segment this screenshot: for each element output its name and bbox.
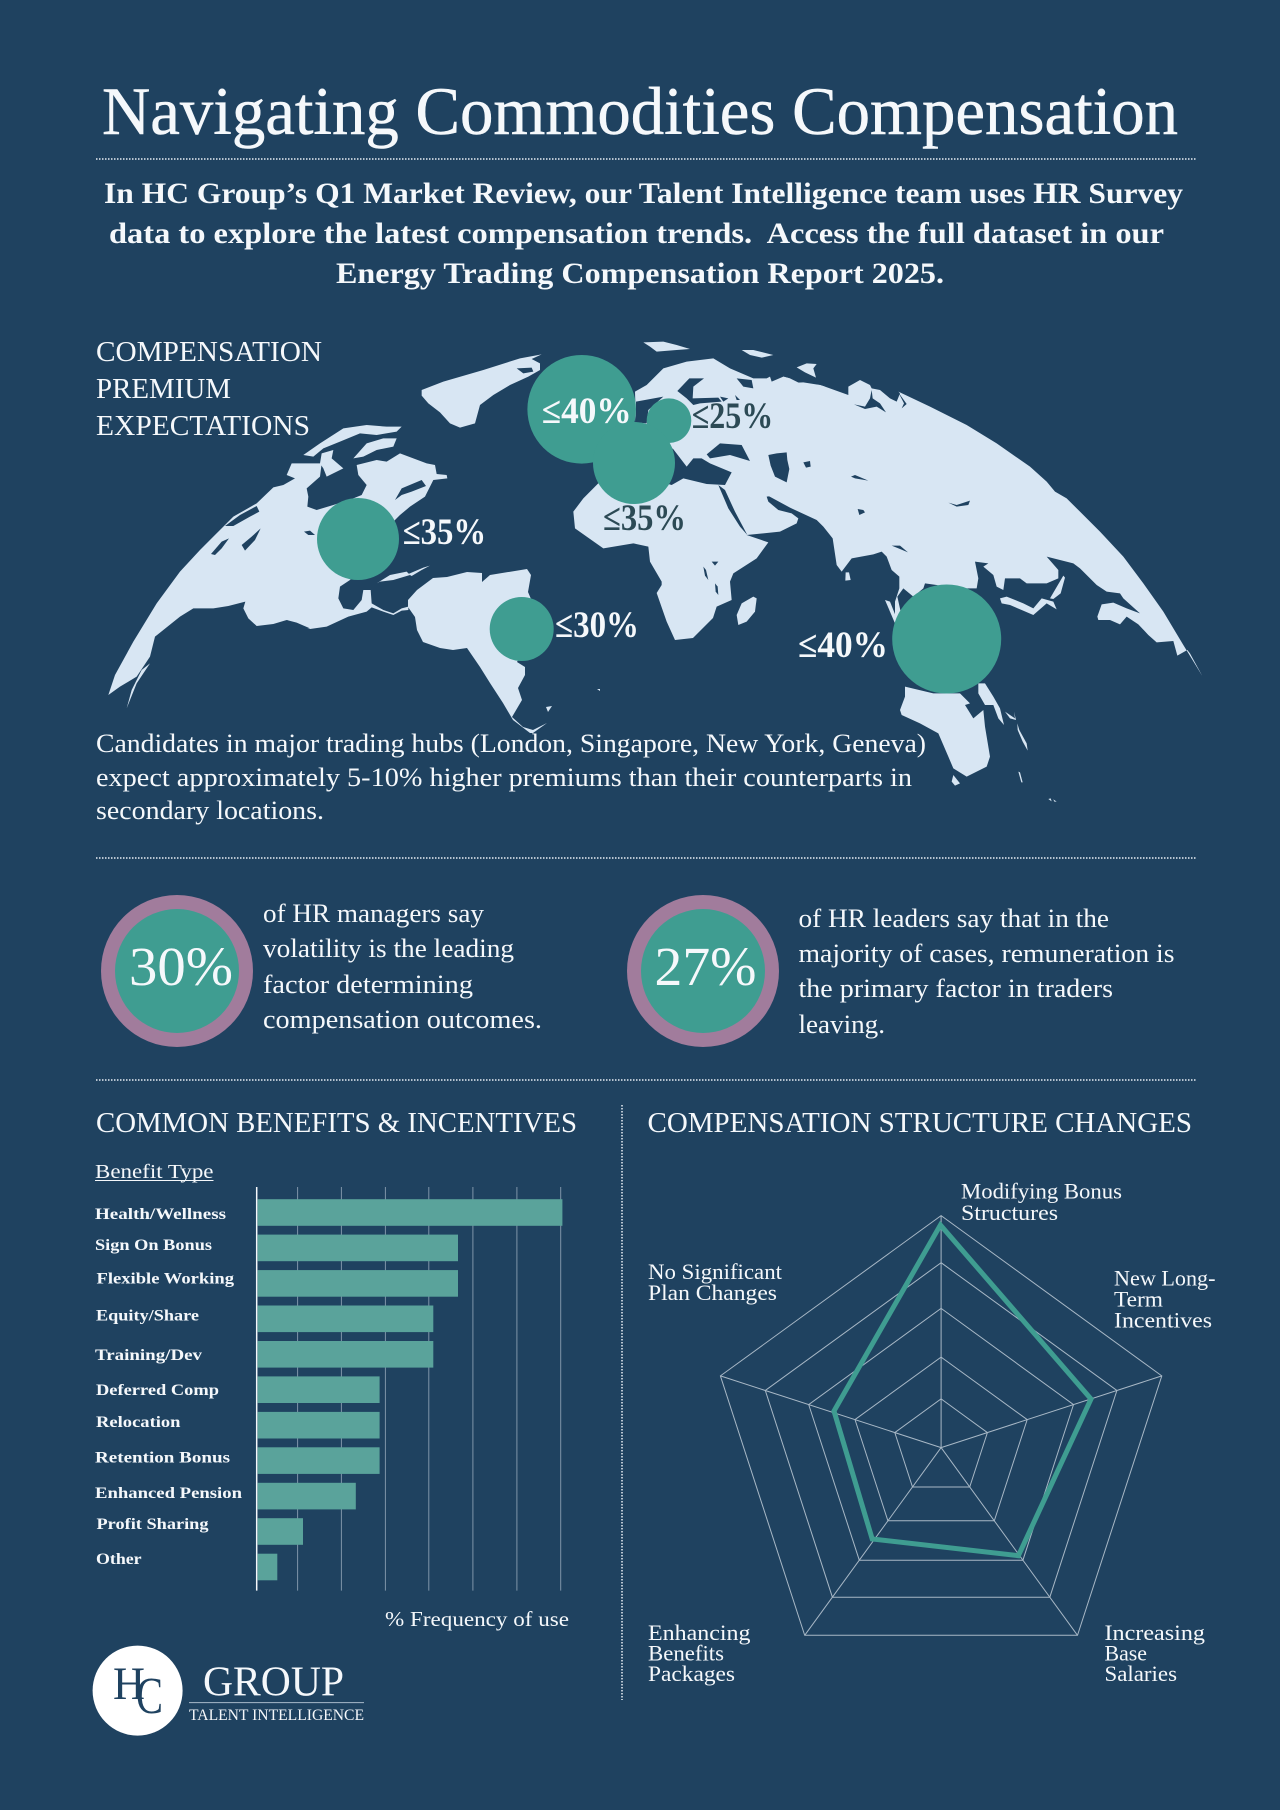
radar label: benefits packages: Packages: [648, 1661, 735, 1686]
bar labels: Sign On Bonus: [95, 1237, 212, 1254]
stat: 27% remuneration: [627, 895, 1174, 1047]
map percentage labels: [403, 391, 888, 666]
map paragraph: secondary locations.: [96, 796, 324, 825]
world map: [108, 342, 1202, 802]
hub circles: [317, 355, 1001, 694]
bar labels: Equity/Share: [96, 1308, 199, 1325]
radar label: benefits packages: Benefits: [648, 1641, 724, 1666]
south america: [408, 569, 547, 733]
text 30%: [263, 899, 542, 1034]
text 30%: of HR managers say: [263, 899, 484, 928]
radar label: no significant: Plan Changes: [648, 1280, 777, 1305]
text 27%: [798, 904, 1174, 1039]
radar label: modifying bonus: [961, 1179, 1122, 1225]
logo: HC Group: TALENT INTELLIGENCE: [189, 1707, 364, 1724]
radar label: long-term incentives: New Long-: [1114, 1265, 1216, 1290]
logo: HC Group: [93, 1646, 364, 1736]
radar data polygon: [834, 1225, 1091, 1556]
text 27%: majority of cases, remuneration is: [798, 939, 1174, 968]
bar labels: Profit Sharing: [96, 1516, 208, 1533]
map paragraph: expect approximately 5-10% higher premiums than their counterparts in: [96, 763, 912, 792]
bar chart: benefits: [95, 1161, 569, 1631]
intro text: [104, 177, 1183, 290]
title: Navigating Commodities Compensation: [102, 73, 1178, 149]
asia landmass: [767, 363, 1202, 676]
radar label: base salaries: Base: [1104, 1641, 1147, 1666]
bar labels: Other: [96, 1551, 142, 1568]
logo mark: H: [113, 1658, 145, 1710]
text 27%: of HR leaders say that in the: [798, 904, 1109, 933]
radar label: benefits packages: [648, 1620, 750, 1686]
radar label: modifying bonus: Structures: [961, 1200, 1058, 1225]
bar labels: Health/Wellness: [95, 1206, 226, 1223]
north america: [108, 425, 447, 708]
logo: HC Group: GROUP: [203, 1659, 344, 1705]
map percentage labels: ≤30%: [555, 605, 639, 646]
heading: compensation premium expectations: PREMIUM: [96, 374, 231, 405]
map percentage labels: ≤35%: [603, 498, 686, 539]
heading: compensation premium expectations: [96, 337, 322, 442]
radar label: long-term incentives: [1114, 1265, 1216, 1333]
logo mark: [93, 1646, 183, 1736]
bars: [258, 1199, 562, 1580]
text 30%: factor determining: [263, 970, 473, 999]
bar labels: Training/Dev: [95, 1347, 202, 1364]
stat: 30% volatility: [101, 895, 542, 1047]
radar label: base salaries: Increasing: [1104, 1620, 1205, 1645]
map paragraph: Candidates in major trading hubs (London, Singapore, New York, Geneva): [96, 729, 926, 758]
text 27%: the primary factor in traders: [798, 974, 1113, 1003]
radar label: base salaries: [1104, 1620, 1205, 1686]
text 30%: compensation outcomes.: [263, 1005, 542, 1034]
radar label: long-term incentives: Term: [1114, 1287, 1163, 1312]
ring 30%: 30%: [129, 936, 233, 997]
intro text: In HC Group’s Q1 Market Review, our Talent Intelligence team uses HR Survey: [104, 177, 1183, 210]
bar labels: Retention Bonus: [95, 1450, 230, 1466]
ring 27%: 27%: [654, 936, 756, 997]
heading: compensation premium expectations: EXPECTATIONS: [96, 411, 310, 442]
map paragraph: [96, 729, 926, 825]
axis label: % Frequency of use: [385, 1607, 569, 1631]
axis title: benefit type: Benefit Type: [95, 1161, 214, 1183]
text 30%: volatility is the leading: [263, 934, 514, 963]
radar label: benefits packages: Enhancing: [648, 1620, 750, 1645]
ring 27%: [627, 895, 779, 1047]
radar label: long-term incentives: Incentives: [1114, 1308, 1212, 1333]
small islands: [546, 689, 600, 712]
bar labels: [95, 1206, 242, 1568]
map percentage labels: ≤40%: [542, 391, 632, 432]
map percentage labels: ≤35%: [403, 512, 486, 553]
map percentage labels: ≤40%: [798, 625, 888, 666]
text 27%: leaving.: [798, 1010, 885, 1039]
greenland, europe, africa: [422, 342, 825, 640]
radar label: modifying bonus: Modifying Bonus: [961, 1179, 1122, 1204]
bar labels: Deferred Comp: [96, 1382, 219, 1399]
bar labels: Enhanced Pension: [95, 1485, 242, 1502]
bar labels: Flexible Working: [96, 1270, 234, 1287]
ring 30%: [101, 895, 253, 1047]
heading: compensation premium expectations: COMPENSATION: [96, 337, 322, 368]
map percentage labels: ≤25%: [692, 396, 773, 437]
radar label: no significant: [648, 1259, 782, 1305]
heading: compensation structure: COMPENSATION STRUCTURE CHANGES: [648, 1108, 1192, 1139]
heading: common benefits: COMMON BENEFITS & INCENTIVES: [96, 1108, 577, 1139]
intro text: Energy Trading Compensation Report 2025.: [336, 257, 944, 290]
asia lakes and inlets: [803, 390, 970, 552]
intro text: data to explore the latest compensation trends. Access the full dataset in our: [109, 217, 1164, 250]
oceania: [900, 683, 1057, 802]
radar label: no significant: No Significant: [648, 1259, 782, 1284]
radar chart: [648, 1179, 1216, 1686]
radar label: base salaries: Salaries: [1104, 1661, 1177, 1686]
bar labels: Relocation: [96, 1414, 181, 1431]
logo mark: C: [136, 1668, 163, 1725]
